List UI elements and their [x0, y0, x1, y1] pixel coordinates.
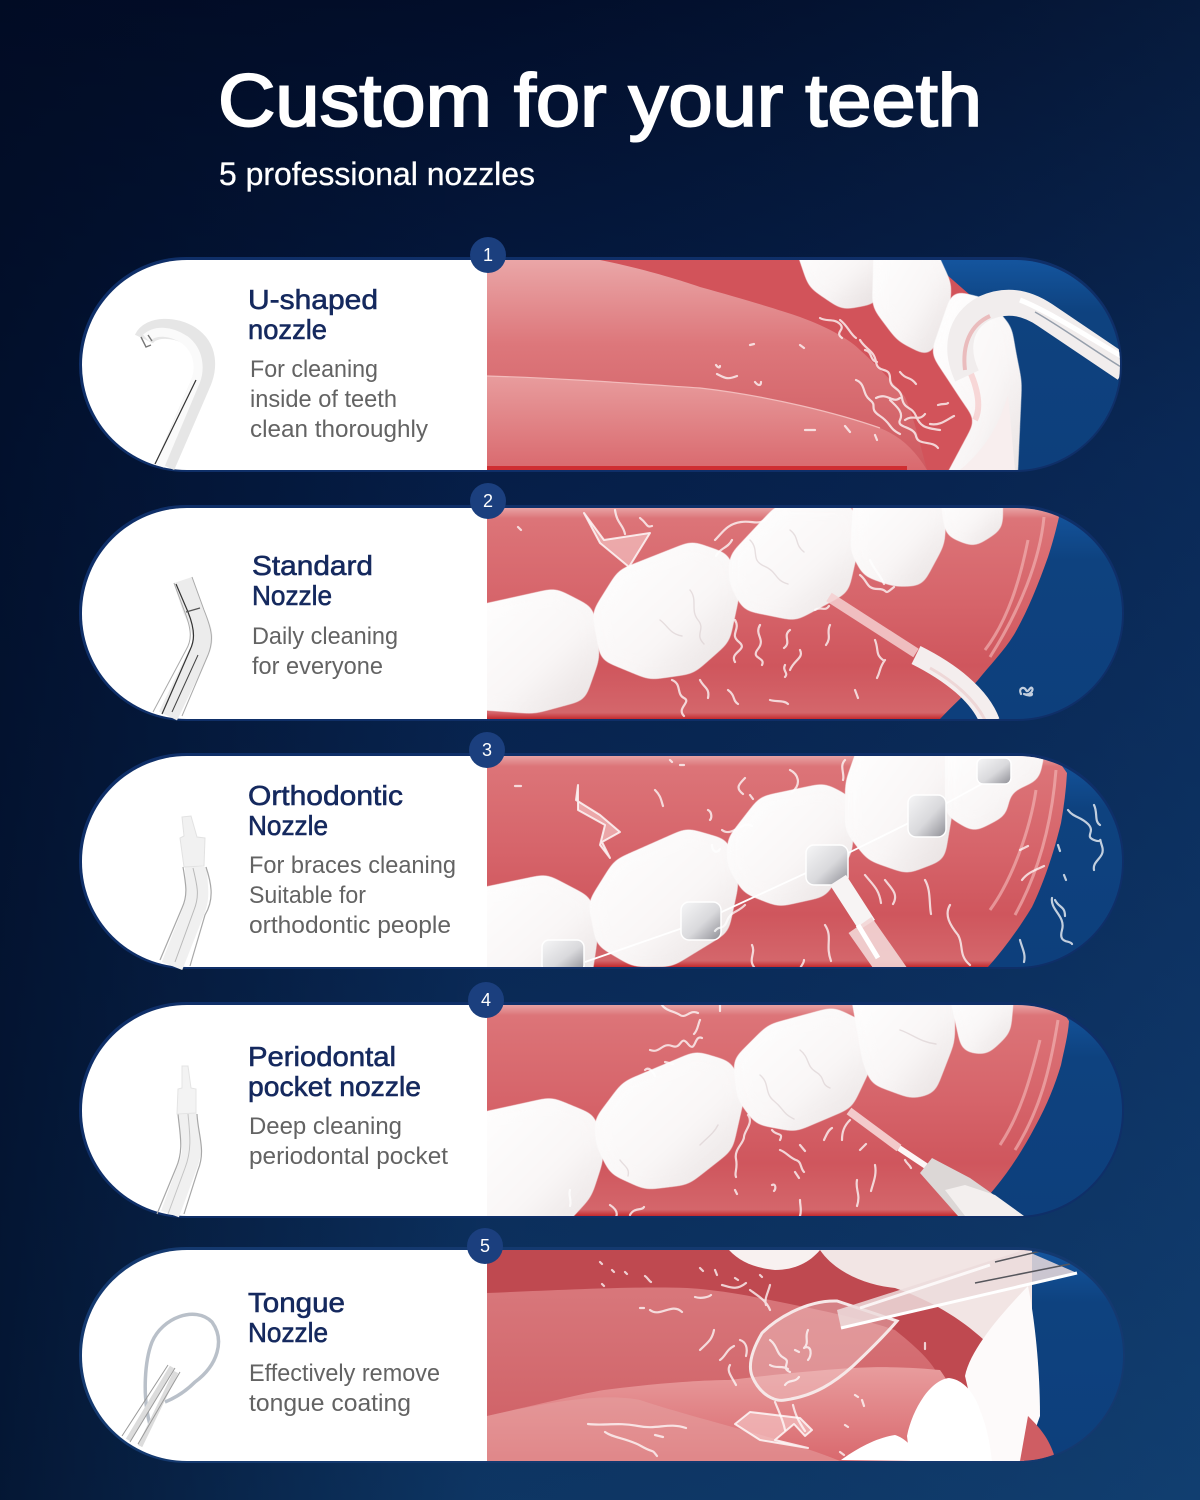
image: tongue cleaning [487, 1250, 1127, 1461]
text: periodontal pocket nozzle: Periodontal [248, 1041, 396, 1072]
text: standard nozzle: Daily cleaning [252, 623, 398, 650]
upper teeth [799, 260, 874, 309]
text: U-shaped nozzle: U-shaped [248, 284, 378, 315]
teeth [465, 592, 596, 710]
image: orthodontic nozzle product [160, 816, 211, 966]
badge 5: 5 [480, 1236, 490, 1256]
tongue nozzle head [750, 1301, 897, 1400]
image: braces with orthodontic nozzle [487, 756, 1122, 967]
image: standard nozzle product [153, 577, 211, 716]
panel 2: standard nozzle [79, 483, 1127, 722]
text: U-shaped nozzle [248, 284, 428, 443]
text: periodontal pocket nozzle: periodontal pocket [249, 1143, 448, 1170]
text: standard nozzle: Standard [252, 550, 373, 581]
text: tongue nozzle: Nozzle [248, 1317, 328, 1348]
text: tongue nozzle: Tongue [248, 1287, 345, 1318]
water splash [716, 318, 954, 448]
upper teeth [729, 1250, 820, 1270]
text: U-shaped nozzle: clean thoroughly [250, 416, 428, 443]
image: lower teeth with standard nozzle [487, 508, 1122, 719]
image: U-shaped nozzle product [141, 329, 205, 466]
panel 5: tongue nozzle [79, 1228, 1127, 1463]
text: periodontal pocket nozzle [248, 1041, 448, 1170]
text: orthodontic nozzle: Orthodontic [248, 780, 403, 811]
panel 4: periodontal pocket nozzle [79, 982, 1127, 1235]
nozzle [849, 1111, 899, 1148]
text: standard nozzle: Nozzle [252, 580, 332, 611]
image: periodontal pocket cleaning [487, 1005, 1122, 1216]
water splash [576, 785, 620, 858]
text: orthodontic nozzle: Nozzle [248, 810, 328, 841]
text: periodontal pocket nozzle: Deep cleaning [249, 1113, 402, 1140]
image: tongue nozzle product [122, 1314, 218, 1446]
panel 3: orthodontic nozzle [79, 732, 1127, 990]
nozzle tube [960, 303, 1125, 376]
water splash [735, 1412, 812, 1448]
brackets [542, 758, 1011, 972]
badge 2 [470, 483, 506, 519]
badge 5 [467, 1228, 503, 1264]
panel 1: U-shaped nozzle [79, 237, 1122, 472]
teeth [487, 1098, 603, 1216]
text: tongue nozzle: Effectively remove [249, 1360, 440, 1387]
badge 3: 3 [482, 740, 492, 760]
text: orthodontic nozzle [248, 780, 456, 939]
badge 3 [469, 732, 505, 768]
subtitle: 5 professional nozzles [219, 156, 535, 192]
text: standard nozzle [252, 550, 398, 680]
nozzle [829, 597, 916, 653]
lower teeth [965, 1286, 1040, 1461]
text: U-shaped nozzle: inside of teeth [250, 386, 397, 413]
badge 4 [468, 982, 504, 1018]
text: U-shaped nozzle: nozzle [248, 314, 327, 345]
water splash [584, 513, 650, 567]
archwire [585, 823, 907, 963]
text: orthodontic nozzle: orthodontic people [249, 912, 451, 939]
badge 2: 2 [483, 491, 493, 511]
text: standard nozzle: for everyone [252, 653, 383, 680]
teeth [487, 875, 598, 967]
text: orthodontic nozzle: For braces cleaning [249, 852, 456, 879]
text: orthodontic nozzle: Suitable for [249, 882, 366, 909]
water splash [569, 1005, 911, 1217]
image: periodontal nozzle product [157, 1066, 202, 1214]
badge 1: 1 [483, 245, 493, 265]
badge 4: 4 [481, 990, 491, 1010]
text: tongue nozzle [248, 1287, 440, 1417]
nozzle [838, 880, 867, 925]
image: mouth interior with U-shaped nozzle [487, 260, 1120, 470]
text: periodontal pocket nozzle: pocket nozzle [248, 1071, 421, 1102]
badge 1 [470, 237, 506, 273]
title: Custom for your teeth [218, 59, 982, 142]
text: tongue nozzle: tongue coating [249, 1390, 411, 1417]
text: U-shaped nozzle: For cleaning [250, 356, 378, 383]
